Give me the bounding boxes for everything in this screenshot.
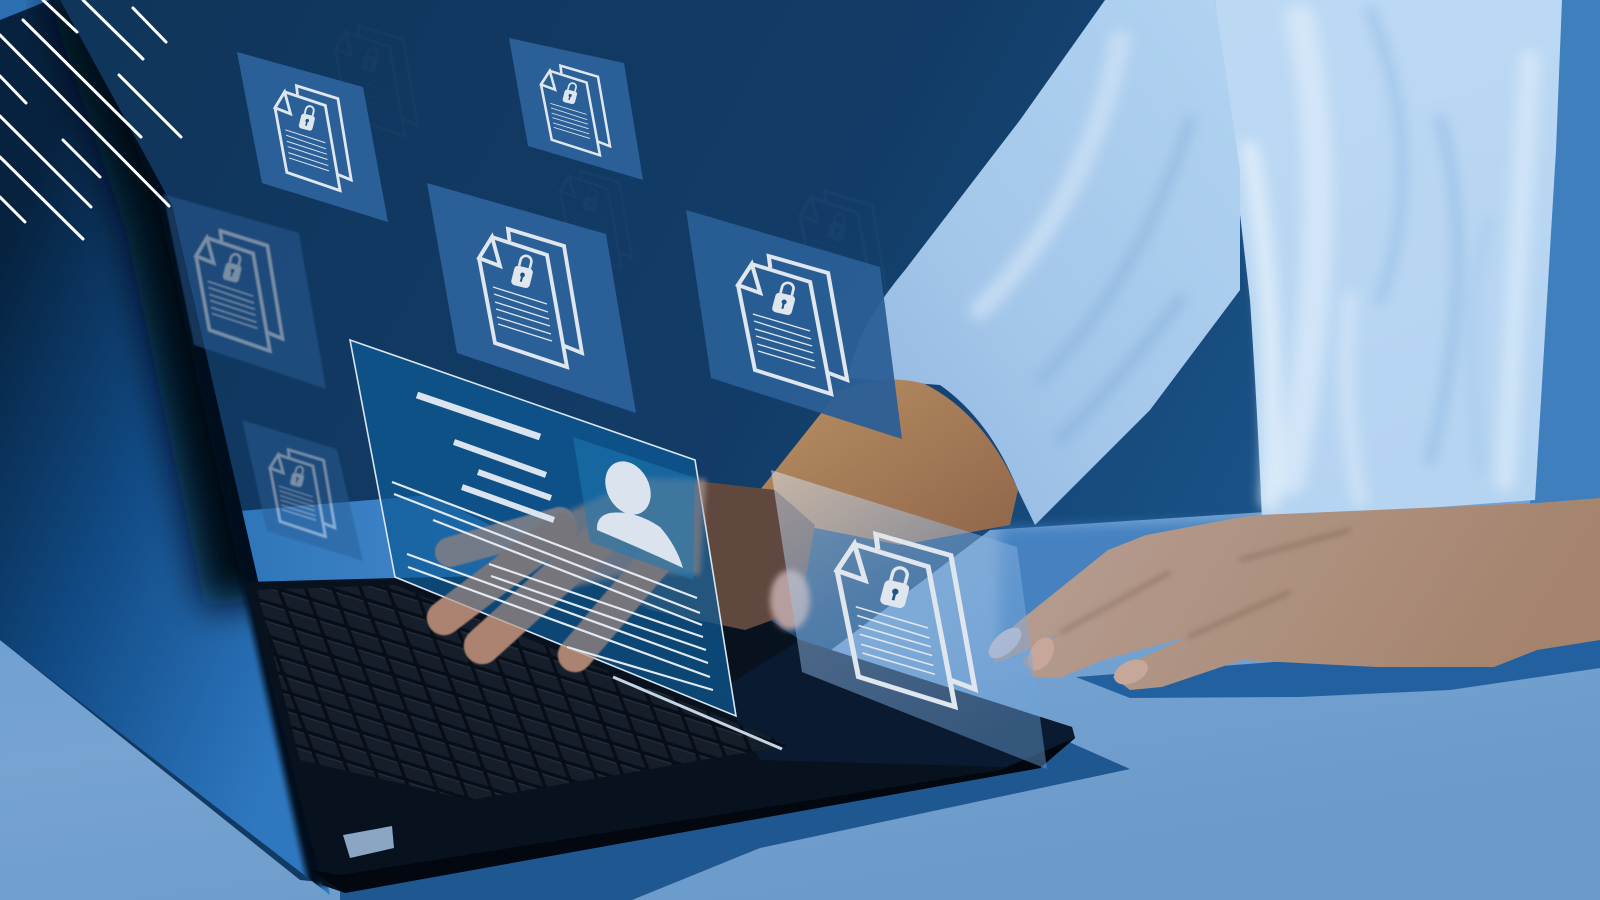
heading lines: [417, 395, 554, 520]
laptop base: [245, 572, 1075, 893]
shirt sleeve: [848, 0, 1240, 525]
photo frame: [573, 437, 695, 580]
keyboard: [257, 585, 790, 800]
spacebar highlight: [613, 677, 782, 749]
left hand on keyboard: [444, 478, 815, 655]
table area behind the laptop: [228, 495, 560, 590]
document panel: centre right: [686, 210, 902, 439]
laptop port: [343, 826, 394, 858]
body text lines: [392, 482, 713, 690]
laptop lid: [0, 0, 330, 895]
right hand: [983, 498, 1600, 698]
decorative diagonal lines: [0, 0, 181, 239]
see-through fingers: [444, 478, 705, 655]
laptop shadow on table: [340, 738, 1130, 900]
faint ghost documents: [335, 26, 888, 308]
document panel: faded left: [163, 194, 326, 389]
fingernails: [983, 622, 1152, 690]
table surface: [0, 490, 1600, 900]
document panel: top left: [237, 52, 388, 222]
document panel: centre: [427, 183, 636, 413]
document panel: top centre: [509, 38, 643, 180]
document panel: glass front right: [771, 470, 1047, 769]
shirt torso: [1215, 0, 1600, 520]
profile card: [350, 340, 736, 716]
icon: person: [596, 453, 683, 568]
hand shadow: [1076, 635, 1600, 698]
finger separations: [1060, 530, 1350, 637]
forearm: [760, 380, 1018, 545]
document panel: faded lower left: [242, 420, 363, 561]
